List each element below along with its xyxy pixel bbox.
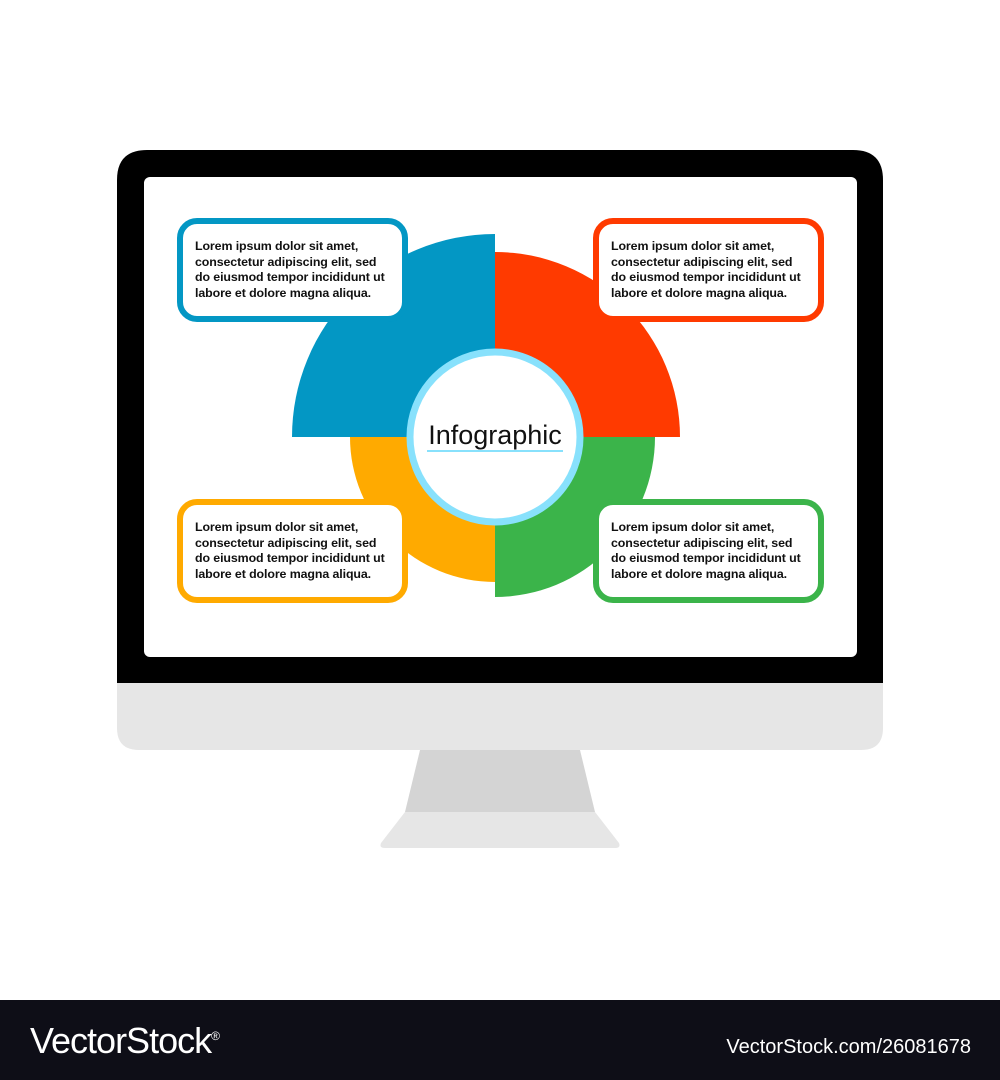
screen [144,177,857,657]
box: green: labore et dolore magna aliqua. [611,567,787,581]
box: green: Lorem ipsum dolor sit amet, [611,520,774,534]
box: blue: Lorem ipsum dolor sit amet, [195,239,358,253]
box: red: Lorem ipsum dolor sit amet, [611,239,774,253]
box: green: consectetur adipiscing elit, sed [611,536,792,550]
box: red: do eiusmod tempor incididunt ut [611,270,801,284]
pie chart [292,234,680,597]
box: blue: labore et dolore magna aliqua. [195,286,371,300]
monitor [117,150,883,848]
footer id: VectorStock.com/26081678 [726,1036,971,1058]
box: orange: consectetur adipiscing elit, sed [195,536,376,550]
box: orange: do eiusmod tempor incididunt ut [195,551,385,565]
footer bar [0,1000,1000,1080]
box: orange: labore et dolore magna aliqua. [195,567,371,581]
box: red [593,218,824,322]
bezel [117,150,883,683]
box: red: consectetur adipiscing elit, sed [611,255,792,269]
chin [117,680,883,750]
box: green: do eiusmod tempor incididunt ut [611,551,801,565]
box: blue [177,218,408,322]
box: blue: do eiusmod tempor incididunt ut [195,270,385,284]
box: blue: consectetur adipiscing elit, sed [195,255,376,269]
box: red: labore et dolore magna aliqua. [611,286,787,300]
box: orange [177,499,408,603]
box: green [593,499,824,603]
stand [380,750,620,848]
footer logo: VectorStock® [30,1020,219,1061]
box: orange: Lorem ipsum dolor sit amet, [195,520,358,534]
center title: Infographic [428,420,562,450]
